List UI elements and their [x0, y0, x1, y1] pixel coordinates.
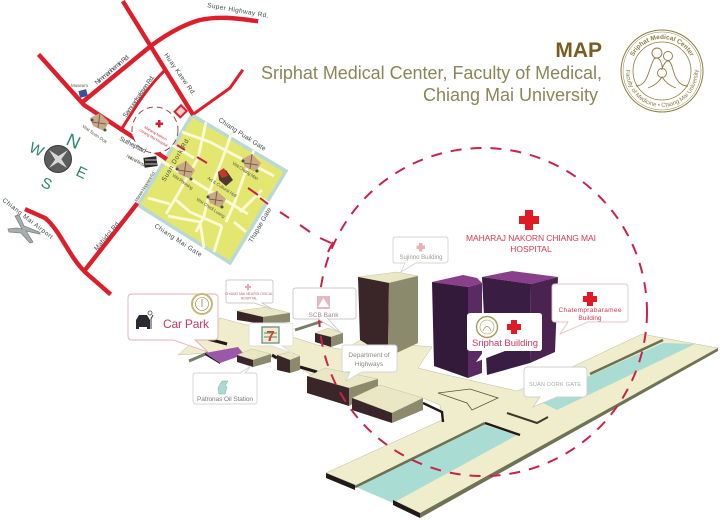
- icon: arts and culture hall: [218, 168, 233, 186]
- road labels: Manee Nopparat Rd.: [134, 170, 156, 203]
- building: Sriphat purple tower right: [482, 271, 558, 375]
- icon: temple Wat Suan Dok: [90, 113, 109, 132]
- hospital title with cross: [466, 210, 596, 254]
- subtitle line 1: Sriphat Medical Center, Faculty of Medical,: [261, 63, 602, 83]
- callout: Patronas Oil Station: Patronas Oil Station: [197, 396, 253, 403]
- road labels: Huay Kaew Rd.: [162, 52, 197, 97]
- callout: SCB Bank: [293, 288, 356, 333]
- callout: Sriphat Building: [467, 313, 542, 362]
- road labels: Mahidol Rd.: [93, 219, 122, 252]
- icon: temple Wat Chedi Luang: [206, 191, 226, 208]
- callout: 7-Eleven: [249, 323, 293, 353]
- callout: Department of Highways: Department of: [348, 352, 390, 359]
- callout: Car Park: Car Park: [163, 317, 210, 331]
- callout: SCB Bank: SCB Bank: [308, 312, 339, 319]
- heading: MAP: MAP: [555, 39, 602, 62]
- icon: compass: E: [73, 163, 90, 183]
- purple car park: [205, 347, 243, 364]
- road labels: Chiang Puak Gate: [217, 117, 267, 153]
- callout: hospital annex: [225, 280, 273, 309]
- icon: temple Wat Phra Sing: [176, 161, 195, 180]
- icon: Sriphat Medical Center seal: [620, 30, 704, 112]
- callout: Suan Dork Gate: SUAN DORK GATE: [529, 382, 581, 388]
- icon: Sriphat Medical Center seal: Sriphat Medical Center: [630, 34, 694, 56]
- icon: airplane: [8, 215, 40, 243]
- callout: Chatemprabaramee Building: Chatemprabaramee: [558, 307, 622, 314]
- icon: museum: [78, 89, 88, 98]
- building: Department of Highways: [307, 368, 378, 406]
- callout: Chatemprabaramee Building: [552, 284, 628, 334]
- road labels: Suthepsad: [118, 136, 147, 155]
- callout: Patronas Oil Station: [193, 366, 257, 404]
- icon: red cross: [507, 320, 521, 334]
- icon: Sriphat Medical Center seal: Faculty of Medicine • Chiang Mai University: [626, 70, 700, 107]
- panel: city road map: [1, 2, 333, 293]
- callout: Chatemprabaramee Building: Building: [578, 315, 602, 322]
- icon: compass: [26, 129, 90, 194]
- old city moat block: [138, 115, 286, 263]
- road labels: Wat Chiang Man: [231, 161, 260, 181]
- road labels: [1, 2, 273, 259]
- icon: seal in callout: [476, 316, 498, 338]
- road labels: Museum: [71, 83, 88, 88]
- road labels: Wat Suan Dok: [81, 124, 109, 145]
- roads: [27, 3, 256, 293]
- road labels: Wat Chedi Luang: [195, 197, 226, 219]
- road labels: Chiang Mai Gate: [153, 223, 203, 259]
- hospital title with cross: HOSPITAL: [510, 244, 552, 254]
- ground plate: [178, 318, 718, 514]
- road labels: Art & Cultural Hall: [206, 176, 238, 198]
- callout: Department of Highways: [342, 345, 397, 381]
- building: small block by car park: [237, 349, 271, 367]
- callout: hospital annex: HOSPITAL: [241, 296, 257, 300]
- dashed connector to hospital area: [177, 145, 333, 252]
- icon: car: [136, 311, 153, 329]
- road labels: Thapae Gate: [248, 206, 273, 244]
- small hospital locator circle: [132, 107, 178, 153]
- road labels: Wat Phrasing: [171, 173, 194, 191]
- subtitle line 2: Chiang Mai University: [423, 85, 598, 105]
- callout: Car Park: [128, 294, 218, 352]
- icon: compass: N: [63, 129, 84, 153]
- callout: Sujinno Building: [393, 237, 448, 272]
- icon: temple Wat Chiang Man: [242, 154, 261, 172]
- callout: 7-Eleven: 7: [266, 328, 275, 345]
- icon: compass: W: [26, 139, 47, 161]
- road labels: Nimmanhemin Rd.: [94, 53, 131, 87]
- building: lower block: [352, 385, 423, 423]
- icon: compass: S: [38, 174, 55, 194]
- road labels: Suan Dork Rd.: [161, 136, 192, 183]
- road labels: Samuadsakisen Rd.: [122, 74, 156, 119]
- callout: Department of Highways: Highways: [355, 361, 384, 368]
- road labels: Super Highway Rd.: [207, 2, 269, 20]
- panel: 3D site plan: [128, 148, 718, 518]
- callout: Sriphat Building: Sriphat Building: [472, 338, 538, 349]
- canals: [356, 343, 695, 503]
- icon: seal small: [192, 294, 212, 314]
- icon: national temple: [143, 156, 158, 168]
- hospital title with cross: MAHARAJ NAKORN CHIANG MAI: [466, 233, 596, 243]
- small hospital locator circle: Chiang Mai Hospital: [138, 128, 168, 148]
- building: seven eleven block: [277, 352, 300, 373]
- road labels: Chiang Mai Airport: [1, 197, 54, 241]
- icon: shrine near gate: [175, 105, 187, 117]
- building: SCB block: [315, 328, 343, 347]
- dashed hospital zone circle: [319, 148, 647, 476]
- callout: hospital annex: CHIANG MAI NEUROLOGICAL: [225, 292, 273, 296]
- callout: Suan Dork Gate: [524, 367, 587, 407]
- building: Sriphat purple tower left: [432, 275, 482, 378]
- title block: [261, 39, 602, 105]
- small hospital locator circle: Maharaj Nakorn: [144, 125, 168, 142]
- road edges and walls: [189, 321, 663, 487]
- callout: Sujinno Building: Sujinno Building: [399, 255, 443, 261]
- building: Sujinno tower: [358, 272, 418, 357]
- road labels: National Temple: [126, 153, 148, 168]
- building: hospital wing near car park: [237, 307, 290, 324]
